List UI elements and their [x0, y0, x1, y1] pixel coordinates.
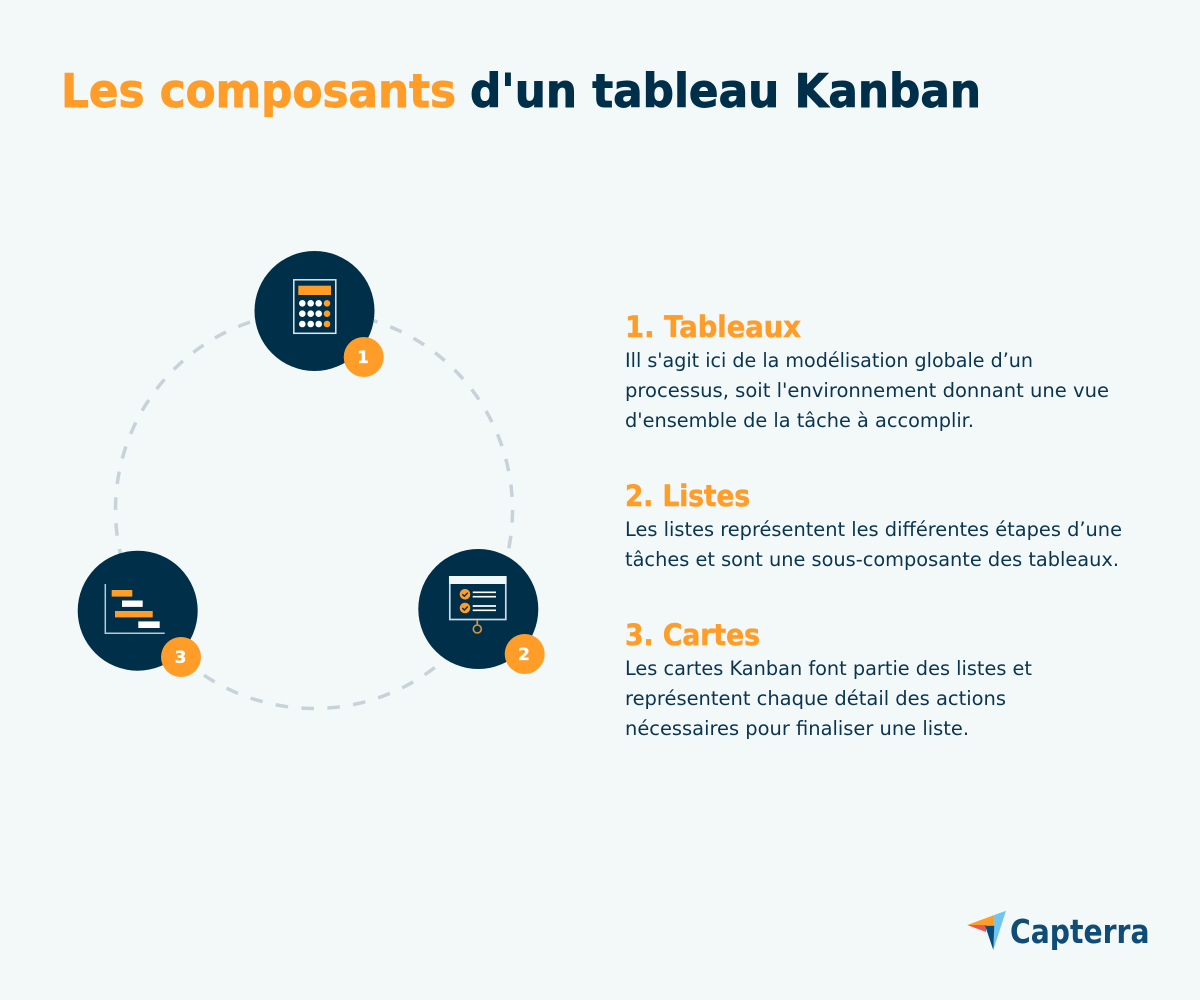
badge 1: 1 [357, 348, 369, 368]
node 3: gantt chart [78, 551, 201, 677]
icon: calculator [294, 280, 336, 333]
icon: gantt chart [105, 584, 165, 633]
text block: 3. Cartes [625, 618, 1032, 740]
title [61, 64, 981, 118]
title: d'un tableau Kanban [470, 64, 981, 118]
wordmark: Capterra [1010, 912, 1150, 951]
text block: 1. Tableaux [625, 310, 1109, 432]
text block: 3. Cartes: Les cartes Kanban font partie des listes et [625, 657, 1032, 680]
icon: checklist board [449, 576, 506, 633]
icon: Capterra arrow [967, 911, 1006, 950]
node 1: calculator [254, 251, 384, 377]
badge 2: 2 [518, 645, 530, 665]
node 2: presentation board [418, 549, 545, 674]
text block: 3. Cartes: représentent chaque détail des actions [625, 687, 1006, 710]
logo: Capterra [967, 911, 1150, 951]
text block: 2. Listes: 2. Listes [625, 479, 750, 513]
badge 3: 3 [175, 648, 186, 668]
text block: 2. Listes: tâches et sont une sous-composante des tableaux. [625, 548, 1119, 571]
dashed cycle ring [116, 312, 512, 708]
text block: 3. Cartes: nécessaires pour finaliser une liste. [625, 717, 969, 740]
title: Les composants [61, 64, 456, 118]
text block: 1. Tableaux: processus, soit l'environnement donnant une vue [625, 379, 1109, 402]
text block: 2. Listes: Les listes représentent les différentes étapes d’une [625, 518, 1122, 541]
text block: 1. Tableaux: d'ensemble de la tâche à accomplir. [625, 409, 974, 432]
text block: 3. Cartes: 3. Cartes [625, 618, 760, 652]
text block: 1. Tableaux: 1. Tableaux [625, 310, 801, 344]
text block: 1. Tableaux: Ill s'agit ici de la modélisation globale d’un [625, 349, 1033, 372]
text block: 2. Listes [625, 479, 1122, 571]
